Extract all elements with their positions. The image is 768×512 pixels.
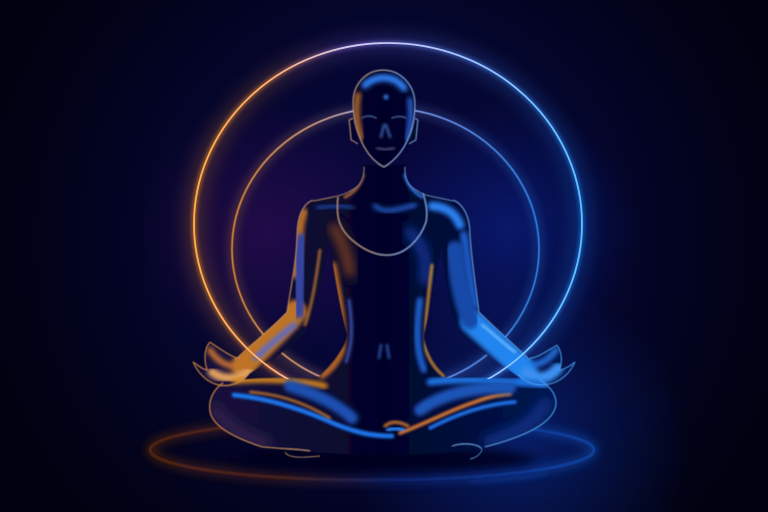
left hand [212,372,248,378]
left arm [243,312,295,366]
feet [285,444,482,459]
blue right shoulder and chest [432,206,460,225]
body highlights [210,78,558,444]
right hand [526,368,558,378]
torso sides [322,265,343,376]
orange left shoulder and chest [296,212,304,275]
left leg [234,395,392,436]
right arm [472,322,525,370]
right leg [400,394,510,433]
neck highlights [345,175,363,197]
head highlights [365,78,404,88]
centre foot [385,422,408,426]
floor glow ring [150,420,594,482]
body silhouette [193,70,575,455]
neon ring: inner [232,108,539,390]
floor shadow [235,447,535,471]
neon ring: outer glow [194,43,582,405]
body contour lines [193,70,575,459]
neon ring: outer core over arms [194,43,582,405]
figure [193,70,575,459]
